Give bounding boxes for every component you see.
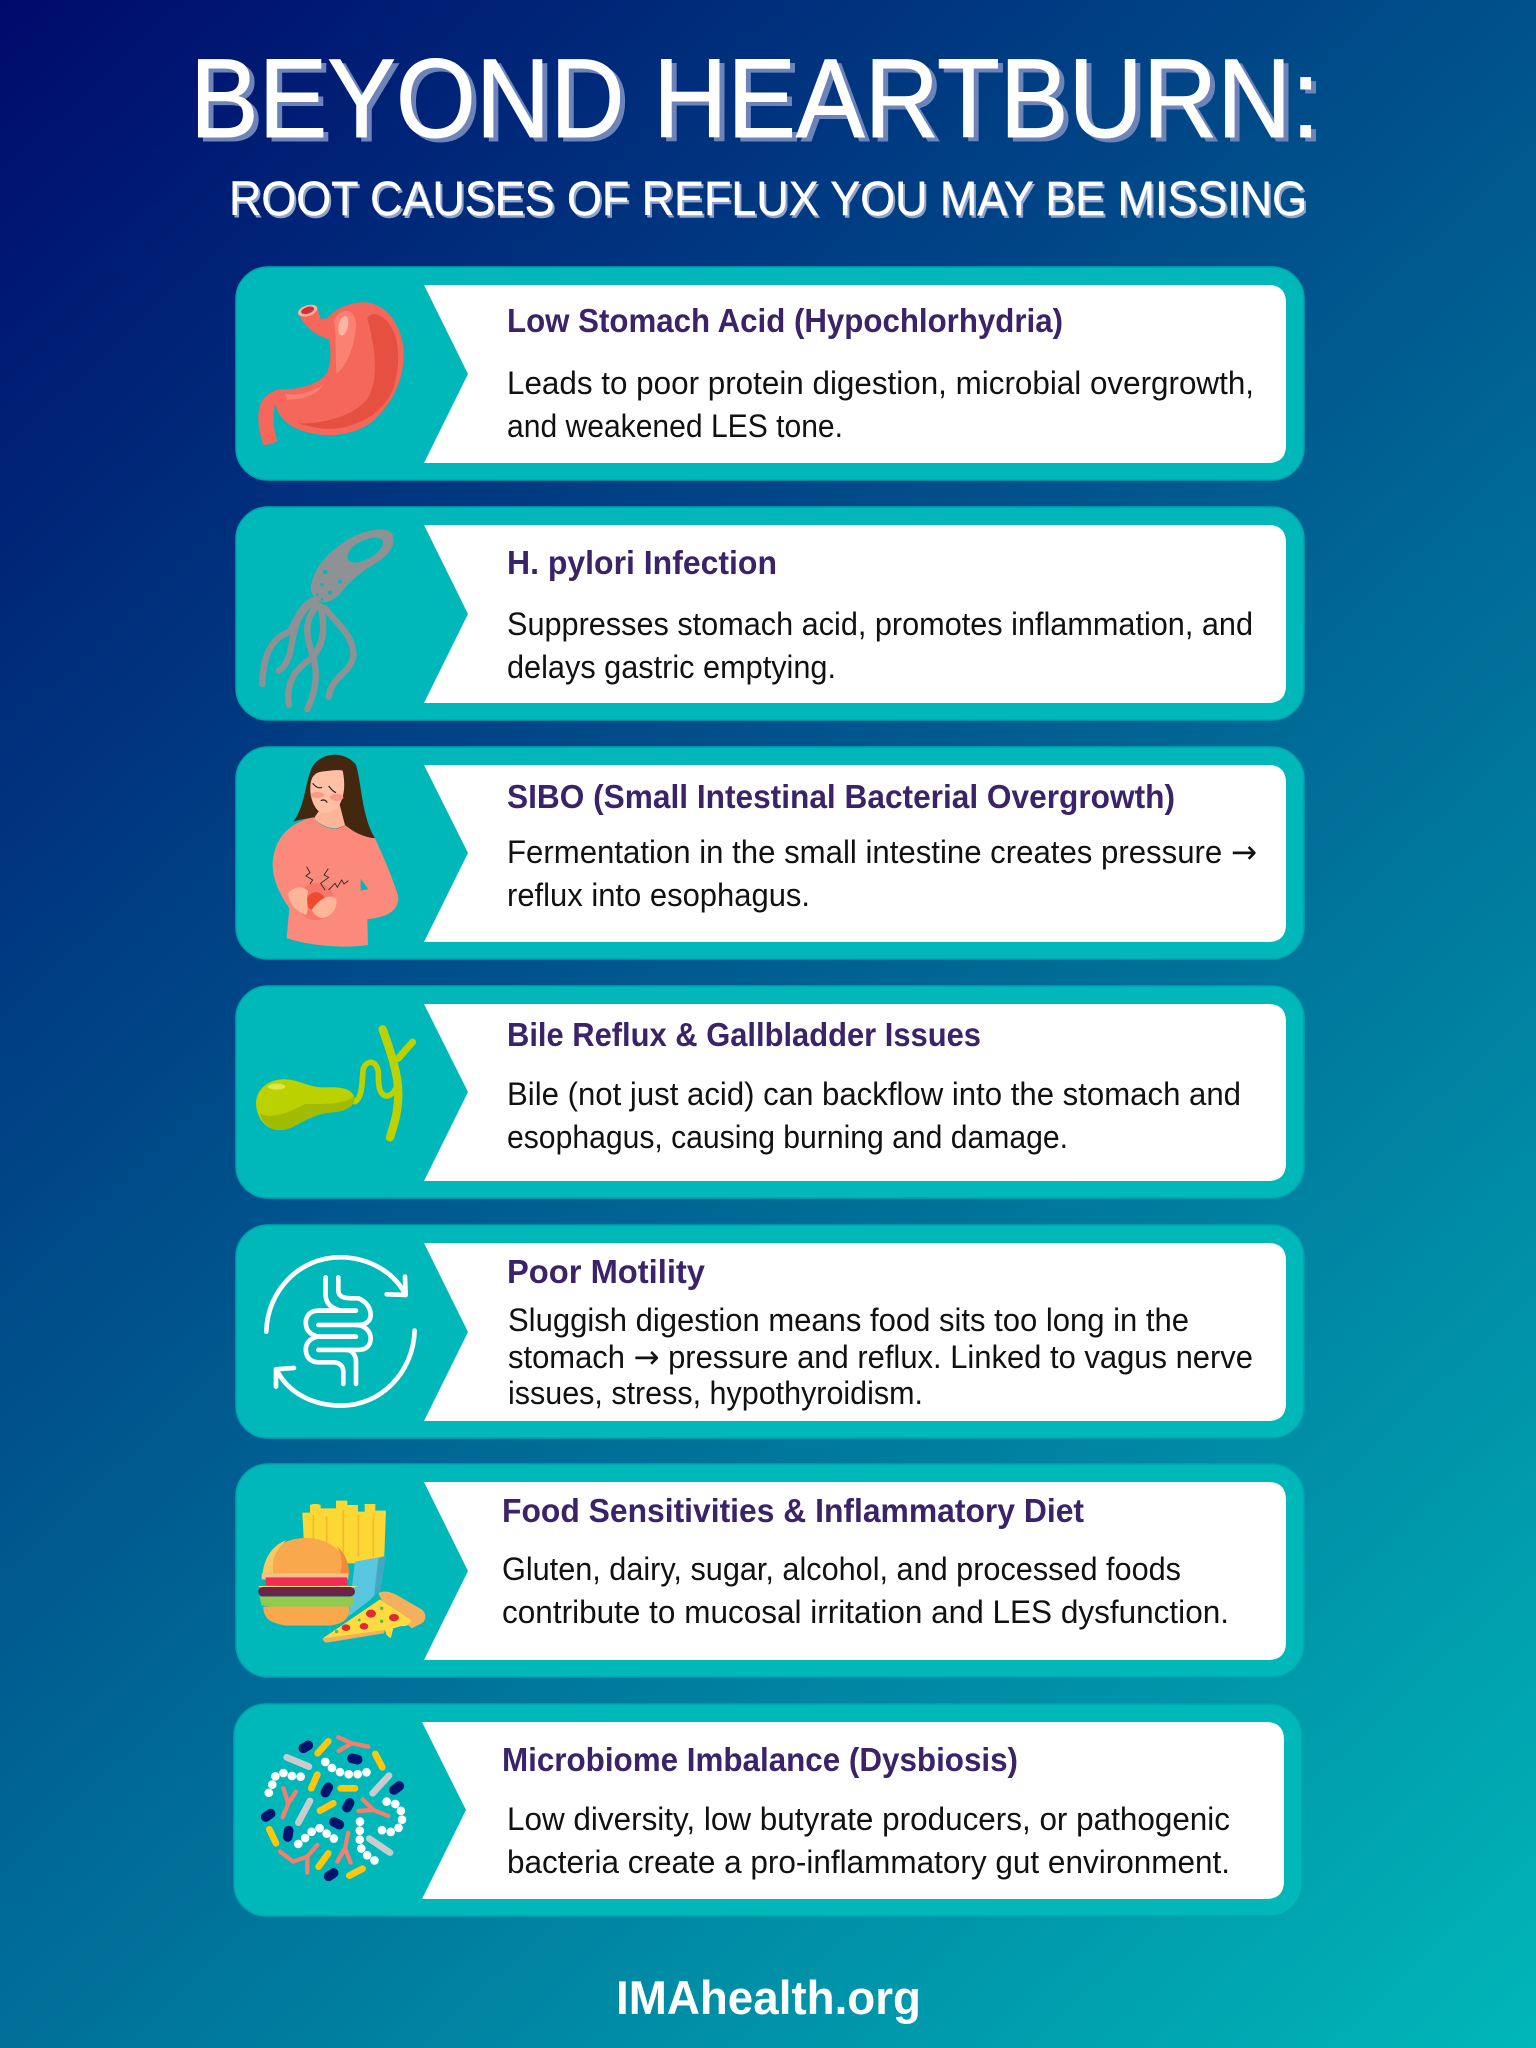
text block: esophagus, causing burning and damage. [507, 1119, 1068, 1155]
subtitle: ROOT CAUSES OF REFLUX YOU MAY BE MISSING [229, 173, 1307, 226]
panel: food sensitivities [236, 1464, 1304, 1677]
heading: H. pylori Infection [507, 544, 777, 581]
heading: SIBO (Small Intestinal Bacterial Overgrowth) [507, 778, 1175, 815]
icon: intestine with cycle arrows [266, 1257, 415, 1406]
text block: Fermentation in the small intestine creates pressure → [507, 833, 1257, 871]
text block: Sluggish digestion means food sits too long in the [508, 1302, 1189, 1338]
text block: and weakened LES tone. [507, 408, 843, 444]
icon: h. pylori bacterium [262, 529, 394, 709]
panel: h. pylori [236, 507, 1304, 720]
icon: burger, fries and pizza [257, 1501, 425, 1643]
icon: stomach [258, 302, 404, 445]
text block: Leads to poor protein digestion, microbial overgrowth, [507, 365, 1254, 401]
text block [507, 1801, 1230, 1880]
text block: bacteria create a pro-inflammatory gut environment. [507, 1844, 1230, 1880]
icon: gallbladder [256, 1029, 413, 1137]
panel: microbiome imbalance [234, 1704, 1302, 1916]
footer website: IMAhealth.org [616, 1971, 921, 2024]
icon: microbiome bacteria [266, 1737, 402, 1876]
heading: Poor Motility [507, 1253, 706, 1290]
heading: Low Stomach Acid (Hypochlorhydria) [507, 302, 1063, 339]
panel: bile reflux [236, 986, 1304, 1198]
text block: Suppresses stomach acid, promotes inflammation, and [507, 606, 1253, 642]
text block [507, 833, 1257, 913]
heading: Bile Reflux & Gallbladder Issues [507, 1016, 981, 1053]
text block [508, 1302, 1253, 1411]
panel: poor motility [236, 1225, 1304, 1438]
text block: contribute to mucosal irritation and LES dysfunction. [502, 1594, 1229, 1630]
text block: Bile (not just acid) can backflow into the stomach and [507, 1076, 1241, 1112]
text block: stomach → pressure and reflux. Linked to vagus nerve [508, 1338, 1253, 1376]
panel: low stomach acid [236, 267, 1304, 480]
icon: woman with stomach pain [273, 755, 398, 947]
heading: Food Sensitivities & Inflammatory Diet [502, 1492, 1084, 1529]
heading: Microbiome Imbalance (Dysbiosis) [502, 1741, 1018, 1778]
panel: SIBO [236, 747, 1304, 959]
text block: Low diversity, low butyrate producers, or pathogenic [507, 1801, 1230, 1837]
text block [502, 1551, 1229, 1630]
title: BEYOND HEARTBURN: [190, 36, 1320, 161]
text block: Gluten, dairy, sugar, alcohol, and processed foods [502, 1551, 1181, 1587]
text block: reflux into esophagus. [507, 877, 810, 913]
text block: issues, stress, hypothyroidism. [508, 1375, 923, 1411]
text block [507, 365, 1254, 444]
text block [507, 606, 1253, 685]
text block [507, 1076, 1241, 1155]
text block: delays gastric emptying. [507, 649, 836, 685]
